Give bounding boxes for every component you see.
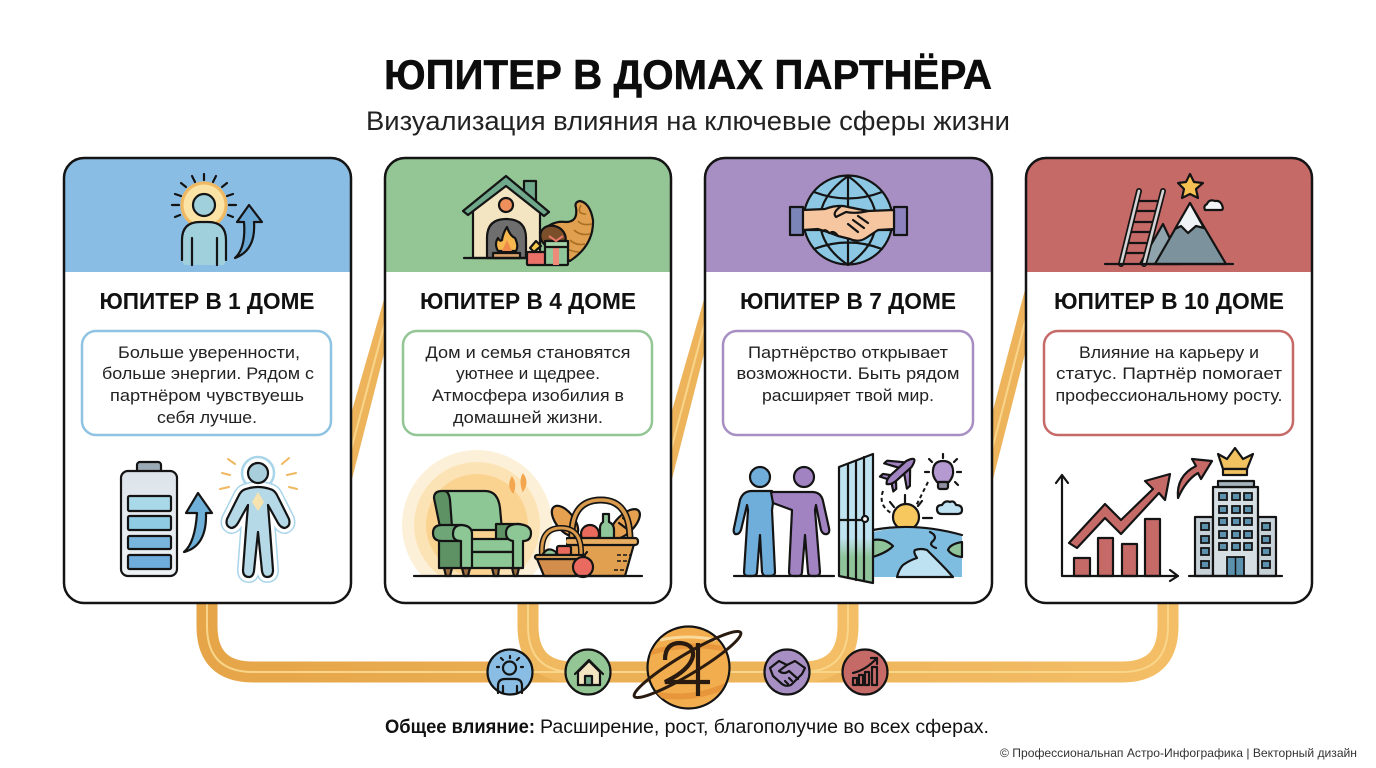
card 4-house header band: [385, 158, 671, 272]
card 1 background: [64, 158, 351, 603]
icon: energised figure: [220, 457, 297, 577]
icon: radiant person with arrow: [172, 174, 262, 265]
card 1 heading: ЮПИТЕР В 1 ДОМЕ: [100, 288, 314, 314]
icon: crown: [1218, 448, 1253, 469]
card 7 description box: расширяет твой мир.: [762, 386, 934, 405]
panel: house 4: [385, 158, 671, 603]
card 10 heading: ЮПИТЕР В 10 ДОМЕ: [1054, 288, 1284, 314]
card 10 description box: статус. Партнёр помогает: [1056, 364, 1282, 383]
card 10 description box: [1044, 331, 1293, 435]
card 4-house heading: ЮПИТЕР В 4 ДОМЕ: [420, 288, 636, 314]
icon: food baskets: [535, 500, 645, 577]
card 7 heading: ЮПИТЕР В 7 ДОМЕ: [740, 288, 956, 314]
card 1 description box: Больше уверенности,: [118, 343, 300, 362]
panel: house 10: [1026, 158, 1312, 603]
panel: house 1: [64, 158, 351, 603]
diagonal connectors between cards: [351, 286, 1026, 483]
icon: upward arrow: [184, 493, 212, 552]
card 4-house description box: домашней жизни.: [453, 408, 603, 427]
card 7 description box: возможности. Быть рядом: [736, 364, 960, 383]
card 4-house background: [385, 158, 671, 603]
card 10 description box: Влияние на карьеру и: [1079, 343, 1259, 362]
card 1 description box: больше энергии. Рядом с: [102, 364, 315, 383]
icon: plane: [875, 447, 925, 497]
card 7 border: [705, 158, 992, 603]
icon: warm glow behind armchair: [402, 450, 552, 575]
icon: small home badge: [566, 650, 610, 694]
title: ЮПИТЕР В ДОМАХ ПАРТНЁРА: [384, 51, 992, 98]
card 4-house description box: Атмосфера изобилия в: [432, 386, 624, 405]
summary line: Расширение, рост, благополучие во всех сферах.: [540, 717, 989, 738]
card 7 description box: Партнёрство открывает: [748, 343, 948, 362]
card 1 border: [64, 158, 351, 603]
icon: curved growth arrow: [1178, 459, 1212, 498]
card 10 header band: [1026, 158, 1312, 272]
icon: small handshake badge: [764, 650, 810, 694]
card 4-house description box: уютнее и щедрее.: [456, 364, 600, 383]
card 1 description box: партнёром чувствуешь: [110, 386, 304, 405]
card 1 description box: [82, 331, 331, 435]
icon: office building: [1189, 481, 1282, 576]
icon: cornucopia with gifts: [527, 201, 593, 265]
icon: open door: [839, 454, 873, 583]
card 7 description box: [723, 331, 973, 435]
icon: cloud: [937, 501, 962, 514]
card 4-house border: [385, 158, 671, 603]
icon: armchair: [433, 491, 531, 576]
icon: small growth chart badge: [842, 650, 888, 694]
golden connecting path: [207, 600, 1168, 672]
card 1 description box: себя лучше.: [157, 408, 257, 427]
card 7 header band: [705, 158, 992, 272]
card 10 description box: профессиональному росту.: [1056, 386, 1282, 405]
icon: earth and sunrise: [873, 482, 962, 577]
card 7 background: [705, 158, 992, 603]
subtitle: Визуализация влияния на ключевые сферы жизни: [366, 106, 1010, 136]
icon: two partners: [734, 467, 834, 576]
panel: house 7: [705, 158, 992, 603]
card 10 border: [1026, 158, 1312, 603]
ground line: [414, 575, 642, 577]
icon: Jupiter planet with orbit and symbol: [629, 624, 746, 708]
card 4-house description box: Дом и семья становятся: [426, 343, 630, 362]
card 10 background: [1026, 158, 1312, 603]
icon: crown base: [1223, 469, 1247, 475]
icon: globe with handshake: [790, 176, 907, 265]
icon: small person badge: [488, 650, 532, 694]
footer credit: © Профессиональнап Астро-Инфографика | Векторный дизайн: [1000, 746, 1357, 760]
summary line: Общее влияние:: [385, 717, 535, 738]
icon: battery: [121, 462, 177, 576]
icon: home with fireplace: [463, 176, 549, 258]
chart: rising bars with arrow: [1056, 474, 1178, 581]
card 4-house description box: [403, 331, 652, 435]
icon: light bulb: [925, 454, 961, 489]
card 1 header band: [64, 158, 351, 272]
icon: ladder and mountain: [1105, 174, 1233, 264]
